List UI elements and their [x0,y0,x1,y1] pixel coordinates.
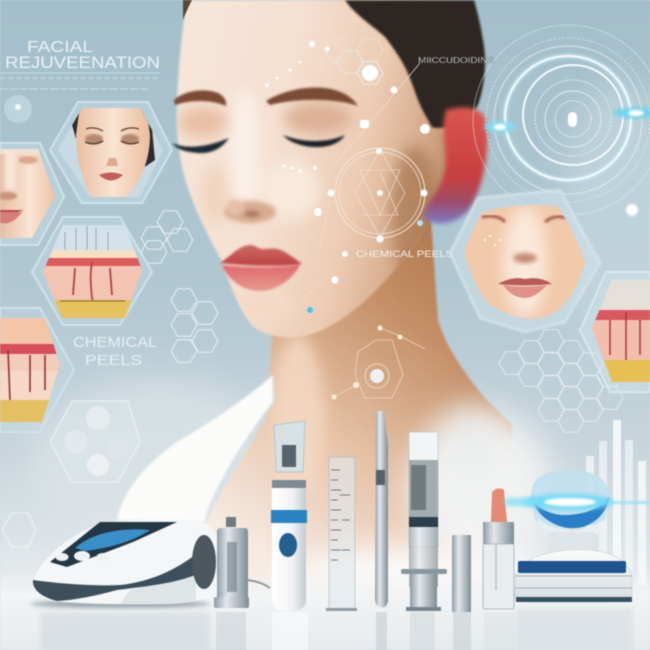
blue light beam [505,494,650,510]
neck highlight [272,335,324,505]
hexagon photo: close-up face left [0,143,64,245]
device: console [30,519,222,608]
hexagon photo: face [50,100,172,203]
title: Facial Rejuvenation: REJUVEENATION [5,53,160,72]
device cable [248,580,270,588]
nose shadow [224,199,276,223]
hexagon node cluster [325,39,430,170]
title rules [0,73,160,89]
label: chemical peels on face: CHEMICAL PEELS [356,249,453,260]
face [177,0,480,337]
hexagon diagram: right skin [580,272,650,392]
neck and chest [205,205,512,612]
light flares [484,108,650,216]
ear [424,107,487,223]
face dots and lines [265,40,330,313]
eyes closed [172,135,345,153]
text: Chemical Peels: PEELS [85,352,142,369]
target circle graphic [473,25,650,215]
small hexagon icon [4,95,32,123]
small hexagon outline [2,513,36,547]
text: Chemical Peels: CHEMICAL [73,334,157,351]
floor reflections [40,608,633,650]
hexagon photo: right face [450,190,600,332]
label: microneedling: MIICCUDOIDING [418,56,495,65]
device: dropper bottle [483,488,514,609]
hexagon diagram: skin cross-section left [0,308,74,432]
device: metal cylinder [214,517,249,608]
diagram circle on cheek [328,148,428,284]
device: microneedling pen [271,421,307,611]
towel [117,375,273,522]
device: syringe [401,432,447,611]
device: small cylinder [452,535,471,612]
background glow [30,80,650,560]
hexagon diagram: skin cross-section [32,217,152,325]
background hexagon lattice [499,330,623,432]
text: Chemical Peels [73,334,157,369]
left hexagon cluster [141,211,218,362]
device: scalpel [375,411,388,608]
floor [0,572,650,650]
white haze [290,410,552,605]
lips [220,245,302,291]
eyebrows [174,87,358,106]
device: ruler vial [326,457,357,611]
shading: eye sockets [177,90,439,323]
title: Facial Rejuvenation: FACIAL [27,39,93,56]
right bars [586,420,646,586]
node on neck [332,326,425,400]
title: Facial Rejuvenation [5,39,160,72]
hair strand top-left [183,0,192,20]
hexagon: molecules [50,401,140,482]
device: light lamp [515,470,632,602]
hair [345,0,485,128]
